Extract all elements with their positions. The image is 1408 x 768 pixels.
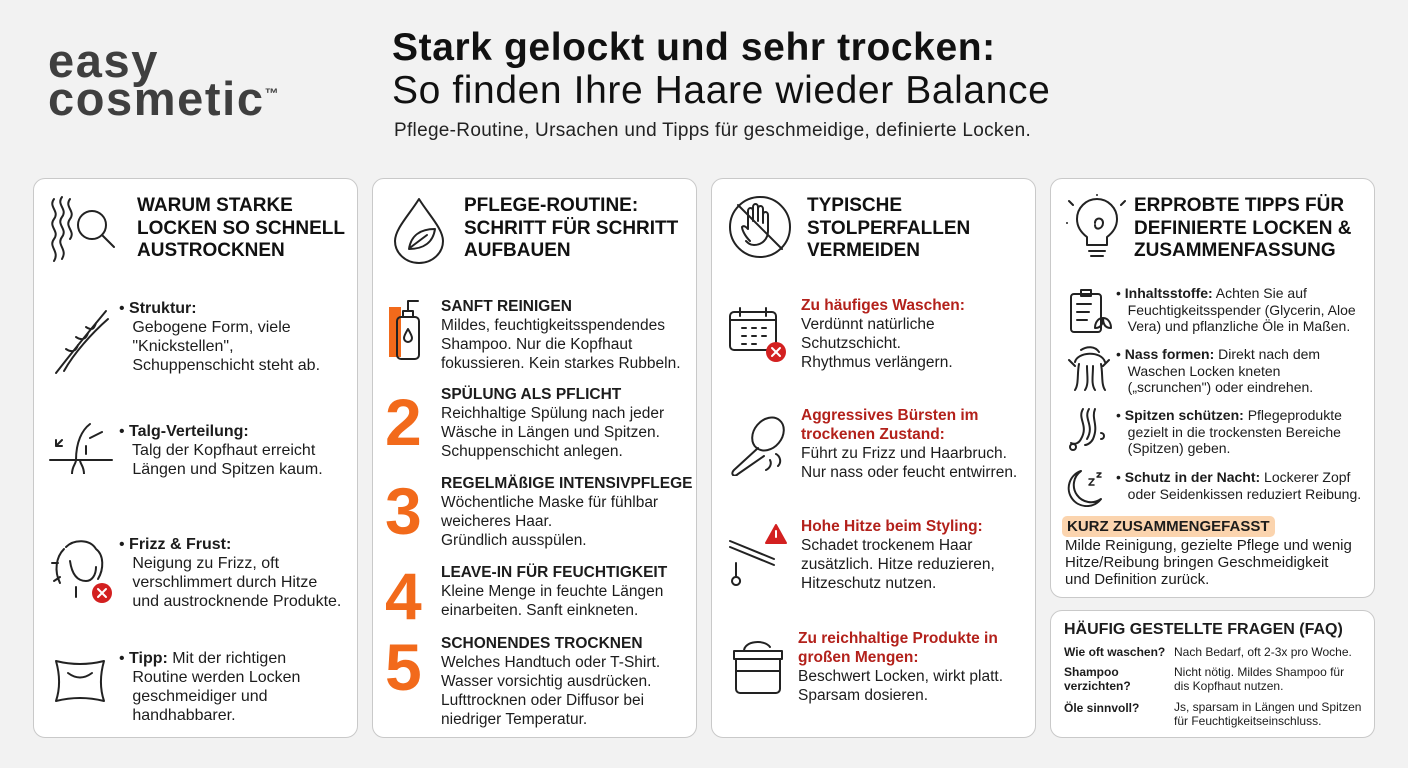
icon: curls magnifier <box>51 196 115 262</box>
step 3: Wöchentliche Maske für fühlbar <box>441 494 658 511</box>
icon: bottle with 1 <box>389 300 420 360</box>
summary label: KURZ ZUSAMMENGEFASST <box>1067 518 1270 535</box>
tip: nacht <box>1068 469 1361 507</box>
step 1 <box>389 298 681 372</box>
item: buersten: trockenen Zustand: <box>801 426 945 443</box>
summary text <box>1065 537 1352 588</box>
item: waschen: Rhythmus verlängern. <box>801 354 953 371</box>
tip: nass formen: • Nass formen: Direkt nach dem <box>1116 346 1320 362</box>
heading <box>137 195 345 261</box>
step 5 <box>385 630 660 728</box>
item: hitze: zusätzlich. Hitze reduzieren, <box>801 556 995 573</box>
step 2: Reichhaltige Spülung nach jeder <box>441 405 664 422</box>
icon: hair ends <box>1069 408 1105 451</box>
panel: tips <box>1050 178 1375 598</box>
step 5: 5 <box>385 630 422 704</box>
icon: brush <box>731 416 785 476</box>
step 5: SCHONENDES TROCKNEN <box>441 635 643 652</box>
summary text: Milde Reinigung, gezielte Pflege und wenig <box>1065 537 1352 554</box>
heading: ZUSAMMENFASSUNG <box>1134 240 1336 261</box>
tip: spitzen <box>1069 407 1342 456</box>
icon: moon <box>1068 470 1102 507</box>
step 1: fokussieren. Kein starkes Rubbeln. <box>441 355 681 372</box>
step 4: LEAVE-IN FÜR FEUCHTIGKEIT <box>441 564 667 581</box>
item: talg <box>49 423 323 478</box>
item: hitze: Hohe Hitze beim Styling: <box>801 518 983 535</box>
item: waschen: Zu häufiges Waschen: <box>801 297 965 314</box>
item: buersten <box>731 407 1017 481</box>
faq rows: Öle sinnvoll? <box>1064 701 1139 715</box>
step 4: einarbeiten. Sanft einkneten. <box>441 602 638 619</box>
item: struktur: Gebogene Form, viele <box>132 319 291 336</box>
tip: inhaltsstoffe: • Inhaltsstoffe: Achten Sie auf <box>1116 285 1307 301</box>
tip: inhaltsstoffe: Feuchtigkeitsspender (Glycerin, Aloe <box>1128 302 1356 318</box>
heading: VERMEIDEN <box>807 240 920 261</box>
faq rows: für Feuchtigkeitseinschluss. <box>1174 714 1321 728</box>
icon: straightener warning <box>729 524 787 586</box>
icon: follicle <box>49 423 113 474</box>
tip: nass formen <box>1068 346 1320 395</box>
step 1: Mildes, feuchtigkeitsspendendes <box>441 317 665 334</box>
item: waschen <box>729 297 965 371</box>
step 4 <box>385 559 668 633</box>
item: frizz: und austrocknende Produkte. <box>132 593 341 610</box>
step 5: Wasser vorsichtig ausdrücken. <box>441 673 651 690</box>
item: hitze: Hitzeschutz nutzen. <box>801 575 936 592</box>
item: tipp: handhabbarer. <box>132 707 236 724</box>
item: frizz: verschlimmert durch Hitze <box>132 574 317 591</box>
tip: inhaltsstoffe: Vera) und pflanzliche Öle in Maßen. <box>1128 318 1350 334</box>
item: struktur: • Struktur: <box>119 300 197 317</box>
step 3: 3 <box>385 474 422 548</box>
faq rows: Wie oft waschen? <box>1064 645 1165 659</box>
faq rows: Js, sparsam in Längen und Spitzen <box>1174 700 1361 714</box>
item: produkte: Sparsam dosieren. <box>798 687 928 704</box>
heading: TYPISCHE <box>807 195 902 216</box>
step 1: SANFT REINIGEN <box>441 298 572 315</box>
item: tipp: geschmeidiger und <box>132 688 268 705</box>
title <box>392 26 1050 112</box>
step 2 <box>385 385 664 460</box>
item: buersten: Nur nass oder feucht entwirren. <box>801 464 1017 481</box>
icon: clipboard <box>1070 289 1112 333</box>
faq rows: verzichten? <box>1064 679 1131 693</box>
item: struktur: "Knickstellen", <box>132 338 234 355</box>
item: frizz: Neigung zu Frizz, oft <box>132 555 279 572</box>
item: talg: • Talg-Verteilung: <box>119 423 249 440</box>
item: buersten: Aggressives Bürsten im <box>801 407 978 424</box>
step 3: REGELMÄßIGE INTENSIVPFLEGE <box>441 475 692 492</box>
icon: hands in hair <box>1068 346 1110 391</box>
logo: cosmetic™ <box>48 72 280 125</box>
icon: frizzy head <box>51 540 112 603</box>
faq rows: Nicht nötig. Mildes Shampoo für <box>1174 665 1344 679</box>
step 3: Gründlich ausspülen. <box>441 532 587 549</box>
heading <box>1134 194 1351 261</box>
step 1: Shampoo. Nur die Kopfhaut <box>441 336 632 353</box>
icon: cream jar <box>733 641 783 694</box>
panel: pitfalls <box>711 178 1036 738</box>
logo <box>48 34 280 125</box>
tip: nacht: • Schutz in der Nacht: Lockerer Zopf <box>1116 469 1350 485</box>
title: So finden Ihre Haare wieder Balance <box>392 69 1050 112</box>
subtitle: Pflege-Routine, Ursachen und Tipps für geschmeidige, definierte Locken. <box>394 120 1031 141</box>
heading: LOCKEN SO SCHNELL <box>137 218 345 238</box>
step 4: 4 <box>385 559 422 633</box>
tip: nass formen: Waschen Locken kneten <box>1128 362 1280 378</box>
heading: STOLPERFALLEN <box>807 218 970 238</box>
item: hitze <box>729 518 995 592</box>
faq rows: Shampoo <box>1064 665 1119 679</box>
summary text: Hitze/Reibung bringen Geschmeidigkeit <box>1065 554 1328 571</box>
item: produkte: Zu reichhaltige Produkte in <box>798 630 998 647</box>
step 2: 2 <box>385 385 422 459</box>
step 2: Wäsche in Längen und Spitzen. <box>441 424 660 441</box>
tip: spitzen: gezielt in die trockensten Bereiche <box>1128 424 1341 440</box>
item: tipp: • Tipp: Mit der richtigen <box>119 650 286 667</box>
item: talg: Talg der Kopfhaut erreicht <box>132 442 315 459</box>
heading: WARUM STARKE <box>137 195 293 216</box>
item: frizz <box>51 536 341 610</box>
icon: pillow <box>55 660 105 702</box>
tip: spitzen: (Spitzen) geben. <box>1128 440 1230 456</box>
item: waschen: Schutzschicht. <box>801 335 901 352</box>
item: hitze: Schadet trockenem Haar <box>801 537 972 554</box>
step 4: Kleine Menge in feuchte Längen <box>441 583 663 600</box>
item: buersten: Führt zu Frizz und Haarbruch. <box>801 445 1007 462</box>
item: produkte <box>733 630 1003 704</box>
faq rows <box>1064 644 1369 732</box>
step 5: Lufttrocknen oder Diffusor bei <box>441 692 644 709</box>
heading: SCHRITT FÜR SCHRITT <box>464 218 678 238</box>
step 2: Schuppenschicht anlegen. <box>441 443 623 460</box>
item: talg: Längen und Spitzen kaum. <box>132 461 323 478</box>
faq heading: HÄUFIG GESTELLTE FRAGEN (FAQ) <box>1064 621 1343 638</box>
heading <box>807 195 970 261</box>
item: struktur: Schuppenschicht steht ab. <box>132 357 320 374</box>
step 3: weicheres Haar. <box>441 513 552 530</box>
step 3 <box>385 474 692 549</box>
icon: drop leaf <box>394 198 444 264</box>
icon: twisted hair <box>55 310 109 374</box>
panel: routine: niedriger Temperatur. <box>441 711 587 728</box>
heading: PFLEGE-ROUTINE: <box>464 195 638 216</box>
panel: FAQ <box>1050 610 1375 738</box>
faq rows: dis Kopfhaut nutzen. <box>1174 679 1283 693</box>
heading <box>464 195 678 261</box>
step 2: SPÜLUNG ALS PFLICHT <box>441 386 621 403</box>
heading: AUSTROCKNEN <box>137 240 285 261</box>
icon: stop hand <box>729 196 791 258</box>
item: tipp: Routine werden Locken <box>132 669 300 686</box>
heading: DEFINIERTE LOCKEN & <box>1134 218 1351 238</box>
heading: AUFBAUEN <box>464 240 571 261</box>
title: Stark gelockt und sehr trocken: <box>392 26 996 69</box>
tip: nass formen: („scrunchen") oder eindrehen. <box>1128 379 1313 395</box>
logo: easy <box>48 34 159 87</box>
panel: causes <box>33 178 358 738</box>
tip: spitzen: • Spitzen schützen: Pflegeprodukte <box>1116 407 1342 423</box>
item: tipp <box>55 650 300 724</box>
faq rows: Nach Bedarf, oft 2-3x pro Woche. <box>1174 645 1352 659</box>
tip: nacht: oder Seidenkissen reduziert Reibung. <box>1128 486 1361 502</box>
item: struktur <box>55 300 320 374</box>
item: frizz: • Frizz & Frust: <box>119 536 231 553</box>
item: produkte: großen Mengen: <box>798 649 919 666</box>
icon: calendar x <box>729 307 786 362</box>
tip: inhaltsstoffe <box>1070 285 1356 334</box>
step 5: Welches Handtuch oder T-Shirt. <box>441 654 660 671</box>
panel: routine <box>372 178 697 738</box>
item: waschen: Verdünnt natürliche <box>801 316 935 333</box>
item: produkte: Beschwert Locken, wirkt platt. <box>798 668 1003 685</box>
icon: bulb <box>1066 194 1126 257</box>
heading: ERPROBTE TIPPS FÜR <box>1134 195 1344 216</box>
summary text: und Definition zurück. <box>1065 571 1209 588</box>
